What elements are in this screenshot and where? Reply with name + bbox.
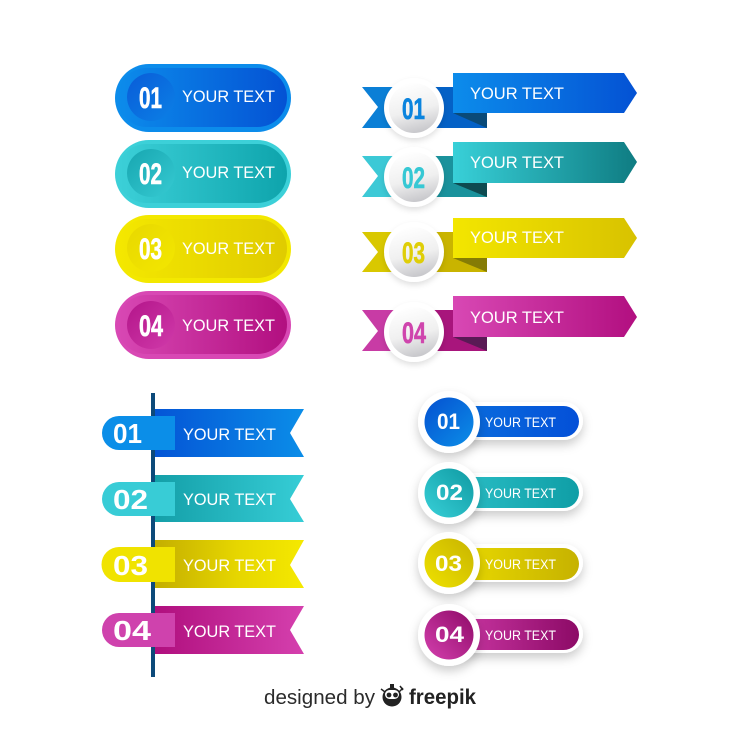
attribution: designed by freepik bbox=[264, 684, 476, 709]
panel: flags on vertical timeline bbox=[102, 393, 304, 677]
ribbon 01: 01 bbox=[402, 93, 425, 126]
pill 01: YOUR TEXT bbox=[182, 87, 275, 106]
pill 01: 01 bbox=[139, 82, 162, 115]
pill 03: 03 bbox=[139, 233, 162, 266]
pill 04 bbox=[115, 291, 291, 359]
label 01 bbox=[418, 391, 583, 453]
label 02: 02 bbox=[436, 480, 463, 505]
ribbon 03: YOUR TEXT bbox=[470, 228, 564, 247]
ribbon 01: YOUR TEXT bbox=[470, 84, 564, 103]
ribbon 02: YOUR TEXT bbox=[470, 153, 564, 172]
ribbon 02 bbox=[362, 142, 637, 207]
ribbon 02: 02 bbox=[402, 162, 425, 195]
flag 02 bbox=[102, 475, 304, 522]
label 03: YOUR TEXT bbox=[485, 557, 556, 572]
flag 01 bbox=[102, 409, 304, 457]
panel: circle and bar labels bbox=[418, 391, 583, 666]
timeline line bbox=[151, 393, 155, 677]
ribbon 04: 04 bbox=[402, 317, 426, 350]
panel: folded ribbon banners bbox=[362, 73, 637, 362]
flag 02: 02 bbox=[113, 484, 148, 515]
pill 03 bbox=[115, 215, 291, 283]
ribbon 03: 03 bbox=[402, 237, 425, 270]
label 02 bbox=[418, 462, 583, 524]
pill 04: 04 bbox=[139, 310, 163, 343]
label 04: 04 bbox=[435, 622, 465, 647]
flag 01: 01 bbox=[113, 418, 142, 449]
flag 03: 03 bbox=[113, 550, 148, 581]
label 03: 03 bbox=[435, 551, 462, 576]
ribbon 04: YOUR TEXT bbox=[470, 308, 564, 327]
pill 02: YOUR TEXT bbox=[182, 163, 275, 182]
label 01: 01 bbox=[437, 409, 460, 434]
flag 01: YOUR TEXT bbox=[183, 425, 276, 444]
flag 03: YOUR TEXT bbox=[183, 556, 276, 575]
flag 04 bbox=[102, 606, 304, 654]
pill 01 bbox=[115, 64, 291, 132]
label 01: YOUR TEXT bbox=[485, 415, 556, 430]
label 03 bbox=[418, 532, 583, 594]
ribbon 03 bbox=[362, 218, 637, 282]
flag 04: YOUR TEXT bbox=[183, 622, 276, 641]
attribution: designed by freepik: freepik bbox=[409, 686, 476, 709]
flag 03 bbox=[102, 540, 304, 588]
pill 02 bbox=[115, 140, 291, 208]
pill 02: 02 bbox=[139, 158, 162, 191]
flag 04: 04 bbox=[113, 615, 152, 646]
pill 03: YOUR TEXT bbox=[182, 239, 275, 258]
label 04 bbox=[418, 604, 583, 666]
pill 04: YOUR TEXT bbox=[182, 316, 275, 335]
attribution: designed by freepik: designed by bbox=[264, 687, 375, 709]
label 02: YOUR TEXT bbox=[485, 486, 556, 501]
ribbon 04 bbox=[362, 296, 637, 362]
icon: freepik mascot bbox=[381, 684, 403, 706]
flag 02: YOUR TEXT bbox=[183, 490, 276, 509]
panel: rounded pill buttons bbox=[115, 64, 291, 359]
label 04: YOUR TEXT bbox=[485, 628, 556, 643]
ribbon 01 bbox=[362, 73, 637, 138]
